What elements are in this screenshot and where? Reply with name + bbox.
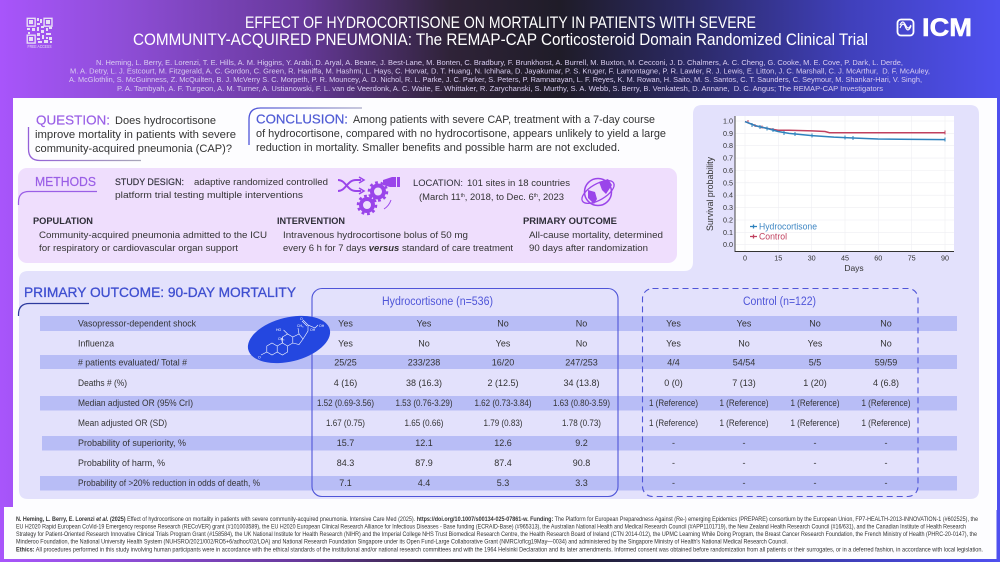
curve: control	[745, 120, 945, 134]
x axis labels: 0	[743, 254, 747, 262]
title: EFFECT OF HYDROCORTISONE ON MORTALITY IN PATIENTS WITH SEVERE	[245, 14, 756, 32]
table values: hydrocortisone: 1.67 (0.75)	[326, 418, 365, 428]
table values: control: 1 (Reference)	[649, 418, 698, 428]
QR code: free access	[27, 18, 52, 49]
x axis labels: 75	[908, 254, 916, 262]
box: control arm	[642, 288, 918, 496]
y axis labels: 0.6	[723, 166, 733, 175]
table values: control: 1 (Reference)	[720, 418, 768, 428]
panel: conclusion: reduction in mortality. Smaller benefits and possible harm are not excluded.	[256, 142, 620, 154]
table values: hydrocortisone: 25/25	[334, 358, 357, 368]
y axis labels: 0.8	[723, 141, 733, 150]
row labels: Vasopressor-dependent shock	[78, 318, 196, 330]
title	[133, 14, 868, 49]
table values: hydrocortisone: 34 (13.8)	[563, 378, 600, 388]
curve: hydrocortisone	[745, 122, 945, 142]
intervention	[277, 216, 513, 254]
methods heading: METHODS	[35, 175, 96, 189]
table values: control: Yes	[808, 338, 823, 348]
author list: A. McGlothlin, S. McGuinness, Z. McQuilten, B. J. McVerry S. C. Morpeth, P. R. Mouncey, A. D. Nichol, R. L. Parke, J. C. Parker, S. Peters, P. Ramnarayan, L. F. Reyes, K. M. Rowan, H. Saito, M. S. Santos, C. T. Saunders, C. Seymour, M. Shankar-Hari, V. Singh,	[69, 75, 922, 84]
table values: hydrocortisone: 12.1	[415, 438, 433, 448]
icon: hydrocortisone molecule: CH₃	[297, 324, 304, 328]
y axis labels	[723, 116, 733, 249]
table values: control: 1 (Reference)	[790, 398, 840, 408]
table values: hydrocortisone: 84.3	[337, 458, 354, 468]
table values: hydrocortisone: 3.3	[575, 478, 588, 488]
table values: hydrocortisone: 1.65 (0.66)	[404, 418, 444, 428]
table values: hydrocortisone: 38 (16.3)	[406, 378, 442, 388]
main white panel	[13, 98, 997, 510]
table values: control: -	[814, 478, 816, 488]
location: , 2023	[538, 192, 564, 203]
x axis labels: 15	[774, 254, 782, 262]
row labels: Median adjusted OR (95% CrI)	[78, 398, 193, 409]
panel: primary outcome and survival background	[19, 105, 979, 499]
table values: hydrocortisone: No	[497, 318, 509, 328]
table values: control: 1 (Reference)	[862, 398, 910, 408]
y axis labels: 0.7	[723, 154, 733, 163]
population: for respiratory or cardiovascular organ support	[39, 243, 238, 254]
icon: hydrocortisone molecule: OH	[310, 328, 316, 332]
y axis labels: 0.0	[723, 240, 733, 249]
panel: question: QUESTION:	[36, 112, 110, 128]
study design: platform trial testing multiple interventions	[115, 190, 303, 201]
table values: control: -	[742, 458, 746, 468]
icon: globe	[578, 176, 618, 208]
heading: primary outcome	[18, 284, 297, 316]
table values: control: 54/54	[733, 358, 755, 368]
y axis labels: 0.5	[723, 178, 733, 187]
panel: conclusion: CONCLUSION:	[256, 112, 348, 126]
table values: control: 4 (6.8)	[873, 378, 899, 388]
footer citation and funding	[16, 516, 983, 553]
table values: control: No	[880, 338, 892, 348]
panel: question: community-acquired pneumonia (CAP)?	[35, 143, 232, 155]
icon: hydrocortisone molecule: CH₃	[278, 337, 285, 341]
table values: control: Yes	[666, 318, 681, 328]
table values: control: 1 (Reference)	[790, 418, 840, 428]
icon: hydrocortisone molecule	[243, 308, 335, 371]
heading: primary outcome: PRIMARY OUTCOME: 90-DAY MORTALITY	[24, 284, 297, 300]
table values: control: -	[884, 438, 888, 448]
table values: control: -	[814, 458, 816, 468]
table values: hydrocortisone	[317, 318, 610, 488]
panel: question: improve mortality in patients with severe	[35, 129, 236, 141]
location: th	[461, 193, 465, 199]
box: control arm: Control (n=122)	[743, 296, 816, 308]
y axis labels: 0.2	[723, 216, 733, 224]
table values: hydrocortisone: No	[576, 338, 587, 348]
table values: hydrocortisone: 1.79 (0.83)	[484, 418, 522, 428]
table values: hydrocortisone: Yes	[417, 318, 432, 328]
table values: hydrocortisone: 7.1	[339, 478, 352, 488]
table values: control: -	[672, 478, 675, 488]
table values: hydrocortisone: No	[576, 318, 587, 328]
table values: control: Yes	[666, 338, 681, 348]
ICM logo	[898, 14, 972, 42]
primary outcome: PRIMARY OUTCOME	[523, 216, 617, 226]
table values: hydrocortisone: 1.53 (0.76-3.29)	[396, 398, 452, 408]
table values: hydrocortisone: 2 (12.5)	[487, 378, 519, 388]
table values: hydrocortisone: Yes	[338, 318, 353, 328]
legend: Hydrocortisone	[759, 222, 817, 232]
footer citation and funding: Minderoo Foundation, the National University Health System (NUHSRO/2021/002/RO5+6/adhoc/02/LOA) and National Research Foundation Singapore under its Open Fund-Large Collaborative Grant (NMRC/ofIcg19May—0034) and administered by the Singapore Ministry of Health's National Medical Research Council.	[16, 539, 788, 546]
y axis labels: 0.1	[723, 228, 733, 237]
table values: control: 5/5	[809, 358, 821, 368]
primary outcome: All-cause mortality, determined	[529, 230, 663, 241]
table values: control: No	[809, 318, 821, 328]
study design	[115, 177, 328, 201]
location: , 2018, to Dec. 6	[465, 192, 534, 203]
panel: question: Does hydrocortisone	[115, 115, 216, 127]
legend: Control	[759, 232, 787, 242]
y axis labels: 1.0	[723, 116, 733, 126]
table values: hydrocortisone: 1.52 (0.69-3.56)	[317, 398, 374, 408]
icon: hydrocortisone molecule: OH	[319, 324, 325, 328]
author list: N. Heming, L. Berry, E. Lorenzi, T. E. Hills, A. M. Higgins, Y. Arabi, D. Aryal, A. Beane, J. Best-Lane, M. Bonten, C. Bradbury, F. Brunkhorst, A. Burrell, M. Buxton, M. Cecconi, J. D. Chalmers, A. C. Cheng, G. Cooke, M. E. Cove, P. Dark, L. Derde,	[96, 58, 903, 67]
intervention: INTERVENTION	[277, 216, 345, 226]
row labels: Mean adjusted OR (SD)	[78, 418, 167, 429]
row labels: Probability of harm, %	[78, 458, 165, 469]
location: (March 11	[419, 192, 461, 203]
row labels: # patients evaluated/ Total #	[78, 358, 188, 368]
table values: control: 59/59	[875, 358, 897, 368]
axis title: days: Days	[844, 263, 864, 273]
table values: hydrocortisone: Yes	[338, 338, 353, 348]
table values: control: -	[672, 438, 675, 448]
table values: hydrocortisone: 1.78 (0.73)	[562, 418, 601, 428]
table values: hydrocortisone: 12.6	[494, 438, 512, 448]
study design: adaptive randomized controlled	[194, 177, 328, 188]
intervention: every 6 h for 7 days versus standard of care treatment	[283, 243, 513, 254]
icon: hydrocortisone molecule: O	[300, 317, 303, 321]
row labels: Influenza	[78, 338, 115, 350]
QR code: free access: FREE ACCESS	[28, 44, 52, 49]
table values: control: 1 (Reference)	[720, 398, 768, 408]
icon: shuffle arrows and gears	[338, 177, 400, 214]
table values: control: 0 (0)	[664, 378, 683, 388]
author list: M. A. Detry, L. J. Estcourt, M. Fitzgerald, A. C. Gordon, C. Green, R. Haniffa, M. Hashmi, L. Hays, C. Horvat, D. T. Huang, N. Ichihara, D. Jayakumar, P. S. Kruger, F. Lamontagne, P. R. Lawler, R. J. Lewis, E. Litton, J. C. Marshall, C. J. McArthur, D. F. McAuley,	[70, 66, 930, 76]
table values: hydrocortisone: 1.63 (0.80-3.59)	[553, 398, 610, 408]
author list	[69, 58, 930, 93]
table values: hydrocortisone: 16/20	[492, 358, 514, 368]
ICM logo: ICM	[922, 14, 972, 42]
table values: control: -	[672, 458, 675, 468]
x axis labels: 90	[941, 254, 949, 262]
panel: conclusion	[249, 108, 666, 154]
panel: conclusion: Among patients with severe CAP, treatment with a 7-day course	[353, 114, 655, 126]
box: hydrocortisone arm	[312, 288, 618, 496]
location	[413, 178, 570, 203]
table values: control: 1 (20)	[803, 378, 827, 388]
location: LOCATION:	[413, 178, 463, 188]
table values: control: 1 (Reference)	[649, 398, 698, 408]
table values: hydrocortisone: 4.4	[418, 478, 430, 488]
table row stripes	[40, 316, 957, 490]
box: hydrocortisone arm: Hydrocortisone (n=536)	[382, 296, 493, 308]
x axis labels: 30	[808, 254, 816, 262]
axis title: survival probability: Survival probability	[705, 157, 716, 231]
icon: hydrocortisone molecule: HO	[276, 328, 282, 332]
x axis labels	[743, 254, 949, 262]
x axis labels: 45	[841, 254, 849, 262]
table values: control: 7 (13)	[732, 378, 756, 388]
table values: hydrocortisone: 9.2	[575, 438, 588, 448]
icon: hydrocortisone molecule: O	[258, 356, 261, 360]
y axis labels: 0.9	[723, 129, 733, 138]
population	[33, 216, 267, 254]
table values: control: 4/4	[667, 358, 680, 368]
table values: control: -	[884, 478, 888, 488]
primary outcome	[523, 216, 663, 254]
panel: conclusion: of hydrocortisone, compared with no hydrocortisone, appears unlikely to yield a large	[256, 128, 666, 140]
table values: control: -	[814, 438, 816, 448]
location: 101 sites in 18 countries	[467, 178, 570, 189]
table values: hydrocortisone: 5.3	[497, 478, 509, 488]
table values: control	[649, 318, 910, 488]
study design: STUDY DESIGN:	[115, 177, 184, 187]
table values: hydrocortisone: 87.4	[494, 458, 512, 468]
table values: hydrocortisone: 15.7	[337, 438, 354, 448]
table values: hydrocortisone: 233/238	[408, 358, 440, 368]
table values: hydrocortisone: 87.9	[415, 458, 433, 468]
table values: control: Yes	[737, 318, 752, 328]
panel: question	[28, 112, 236, 160]
location: th	[534, 193, 538, 199]
table values: control: -	[742, 438, 746, 448]
table values: hydrocortisone: 4 (16)	[334, 378, 357, 388]
panel: methods	[18, 168, 677, 263]
table values: control: 1 (Reference)	[862, 418, 910, 428]
footer white panel	[4, 507, 996, 559]
table values: hydrocortisone: 1.62 (0.73-3.84)	[474, 398, 532, 408]
table values: hydrocortisone: Yes	[496, 338, 511, 348]
title: COMMUNITY-ACQUIRED PNEUMONIA: The REMAP-CAP Corticosteroid Domain Randomized Clinical Trial	[133, 31, 868, 49]
table values: hydrocortisone: 247/253	[565, 358, 598, 368]
table values: control: -	[884, 458, 888, 468]
table values: hydrocortisone: No	[418, 338, 430, 348]
row labels	[78, 318, 260, 489]
row labels: Probability of superiority, %	[78, 438, 186, 449]
population: Community-acquired pneumonia admitted to the ICU	[39, 230, 267, 241]
row labels: Deaths # (%)	[78, 378, 127, 389]
primary outcome: 90 days after randomization	[529, 243, 648, 254]
survival chart	[705, 116, 954, 273]
intervention: Intravenous hydrocortisone bolus of 50 mg	[283, 230, 468, 241]
legend	[750, 222, 817, 242]
x axis labels: 60	[874, 254, 882, 262]
table values: control: No	[880, 318, 892, 328]
author list: P. A. Tambyah, A. F. Turgeon, A. M. Turner, A. Ustianowski, F. L. van de Veerdonk, A. C. Waite, E. Whittaker, R. Zarychanski, S. Murthy, S. A. Webb, S. Berry, B. Venkatesh, D. Annane, D. C. Angus; The REMAP-CAP Investigators	[117, 84, 883, 93]
population: POPULATION	[33, 216, 93, 226]
row labels: Probability of >20% reduction in odds of death, %	[78, 478, 260, 489]
table values: control: No	[738, 338, 750, 348]
table values: hydrocortisone: 90.8	[573, 458, 590, 468]
y axis labels: 0.4	[723, 191, 733, 200]
y axis labels: 0.3	[723, 203, 733, 212]
table values: control: -	[742, 478, 746, 488]
